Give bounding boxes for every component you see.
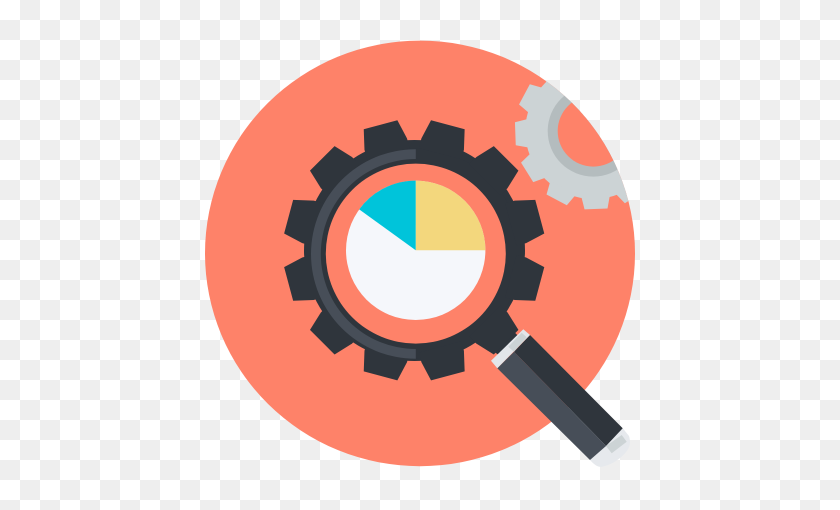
lens interior [326,164,506,344]
handle light half [497,352,606,460]
pie chart [346,181,485,320]
collar shade [508,333,527,352]
icon: large dark gear [283,119,545,382]
lens ring highlight [311,149,416,359]
cap shade [606,435,627,453]
handle neck [483,322,523,360]
magnifier handle [491,329,630,467]
background circle [205,41,635,466]
handle dark half [514,335,623,446]
pie slice: yellow [416,181,485,250]
pie slice: teal [359,181,416,250]
handle end cap [590,428,630,467]
pie slice: white [346,181,485,320]
icon: small gray gear [515,81,628,210]
collar [491,329,530,368]
